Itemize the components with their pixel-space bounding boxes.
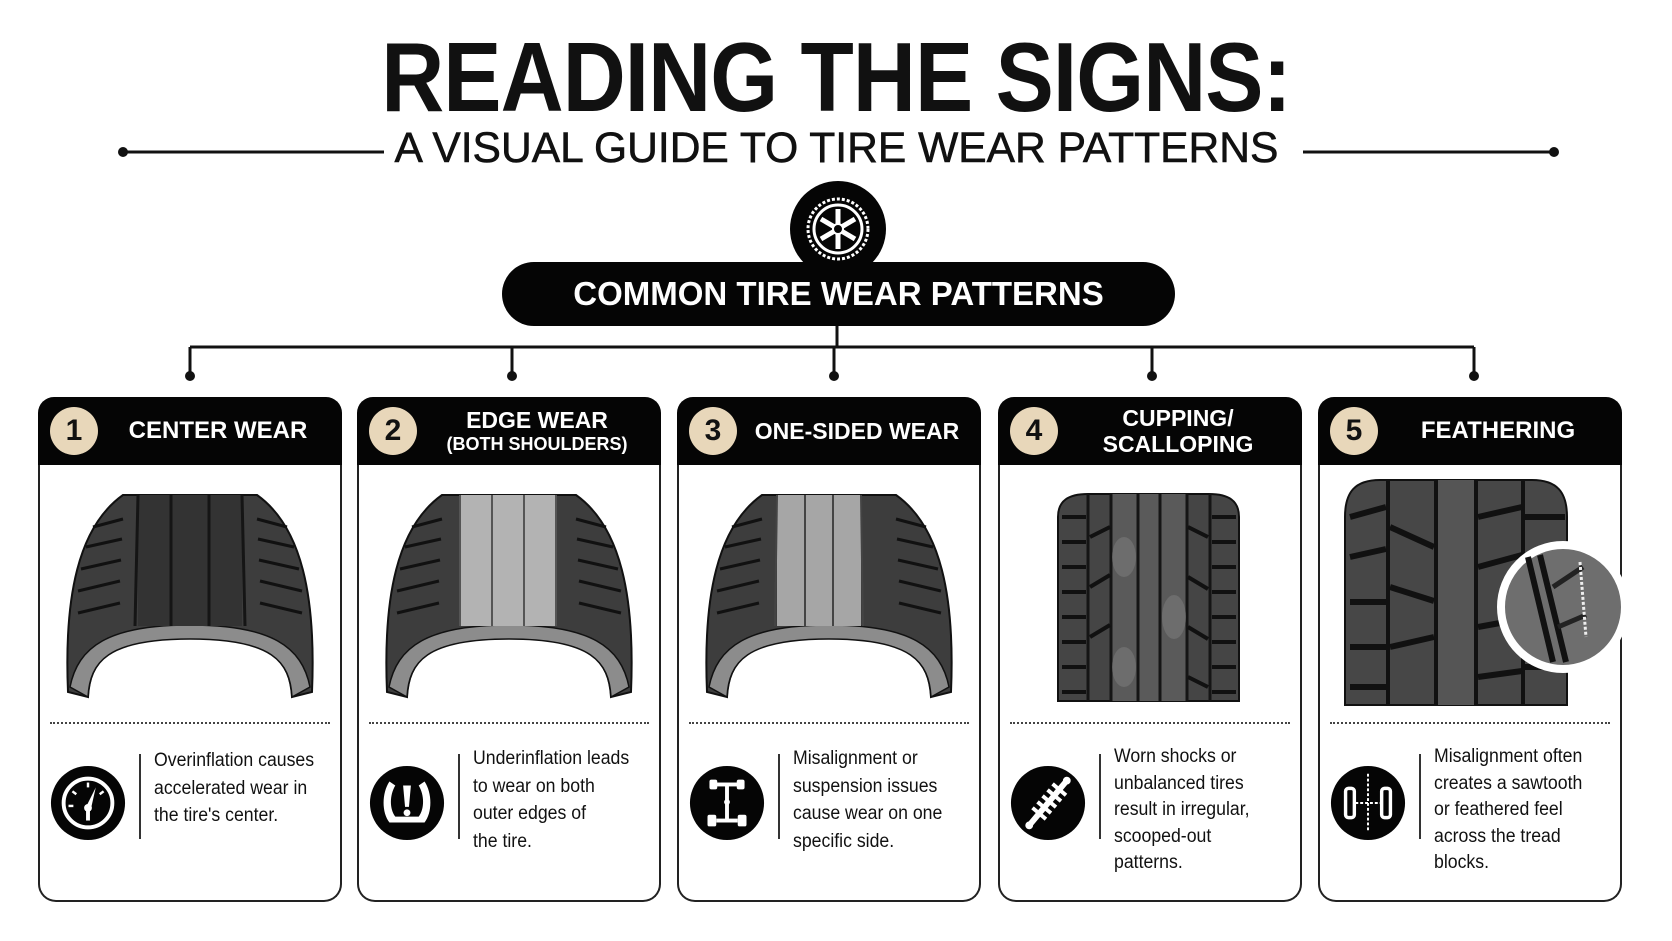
subtitle rules <box>118 147 1559 157</box>
header 1: CENTER WEAR <box>129 417 307 444</box>
header 2 <box>357 397 661 465</box>
panel: edge wear <box>357 397 661 902</box>
description 3 <box>793 748 942 852</box>
title: READING THE SIGNS: <box>381 22 1291 132</box>
tire image 3 <box>705 494 953 698</box>
icon: gauge <box>50 766 126 840</box>
description 1: accelerated wear in <box>154 778 307 798</box>
panel: feathering <box>1318 397 1622 902</box>
description 5: Misalignment often <box>1434 746 1582 767</box>
subtitle: A VISUAL GUIDE TO TIRE WEAR PATTERNS <box>394 124 1278 172</box>
header 2: 2 <box>385 414 401 447</box>
description 4: Worn shocks or <box>1114 746 1236 767</box>
description 5: creates a sawtooth <box>1434 772 1582 794</box>
description 4: result in irregular, <box>1114 799 1250 820</box>
header 1 <box>38 397 342 465</box>
description 5: blocks. <box>1434 852 1489 873</box>
panel: one-sided wear <box>677 397 981 902</box>
heading pill: COMMON TIRE WEAR PATTERNS <box>573 275 1104 312</box>
header 2: (BOTH SHOULDERS) <box>446 434 628 454</box>
icon: axle <box>690 766 764 840</box>
header 5: FEATHERING <box>1421 417 1575 444</box>
icon: shock absorber <box>1010 766 1086 840</box>
description 5 <box>1434 746 1582 873</box>
icon: tire <box>790 181 886 262</box>
header 3 <box>677 397 981 465</box>
description 4: patterns. <box>1114 852 1183 873</box>
header 1: 1 <box>66 414 82 447</box>
description 4: unbalanced tires <box>1114 772 1244 794</box>
description 2: the tire. <box>473 830 532 852</box>
description 1: Overinflation causes <box>154 750 314 771</box>
header 4: SCALLOPING <box>1103 431 1253 457</box>
description 3: specific side. <box>793 830 894 852</box>
panel: cupping <box>998 397 1302 902</box>
panel: center wear <box>38 397 342 902</box>
description 2: Underinflation leads <box>473 748 629 769</box>
icon: tpms <box>370 766 444 840</box>
tire image 5 <box>1344 479 1622 706</box>
description 1 <box>154 750 314 826</box>
heading pill <box>502 262 1175 326</box>
description 1: the tire's center. <box>154 805 278 826</box>
description 4 <box>1114 746 1250 873</box>
magnifier callout <box>1501 545 1625 669</box>
header 5 <box>1318 397 1622 465</box>
header 4 <box>998 397 1302 465</box>
header 5: 5 <box>1346 414 1362 447</box>
header 4: CUPPING/ <box>1122 405 1234 431</box>
connector tree <box>185 326 1479 381</box>
description 3: suspension issues <box>793 776 937 796</box>
description 2 <box>473 748 629 852</box>
tire image 4 <box>1057 493 1240 702</box>
header 3: 3 <box>705 414 721 447</box>
description 3: Misalignment or <box>793 748 918 769</box>
header 2: EDGE WEAR <box>466 406 608 432</box>
icon: wheel alignment <box>1330 766 1406 840</box>
tire image 2 <box>385 494 633 698</box>
header 3: ONE-SIDED WEAR <box>755 418 959 444</box>
description 5: or feathered feel <box>1434 799 1563 820</box>
header 4: 4 <box>1026 414 1042 447</box>
description 3: cause wear on one <box>793 803 942 824</box>
description 2: outer edges of <box>473 803 586 824</box>
description 4: scooped-out <box>1114 826 1211 846</box>
tire image 1 <box>66 494 314 698</box>
description 5: across the tread <box>1434 826 1561 846</box>
description 2: to wear on both <box>473 776 595 796</box>
